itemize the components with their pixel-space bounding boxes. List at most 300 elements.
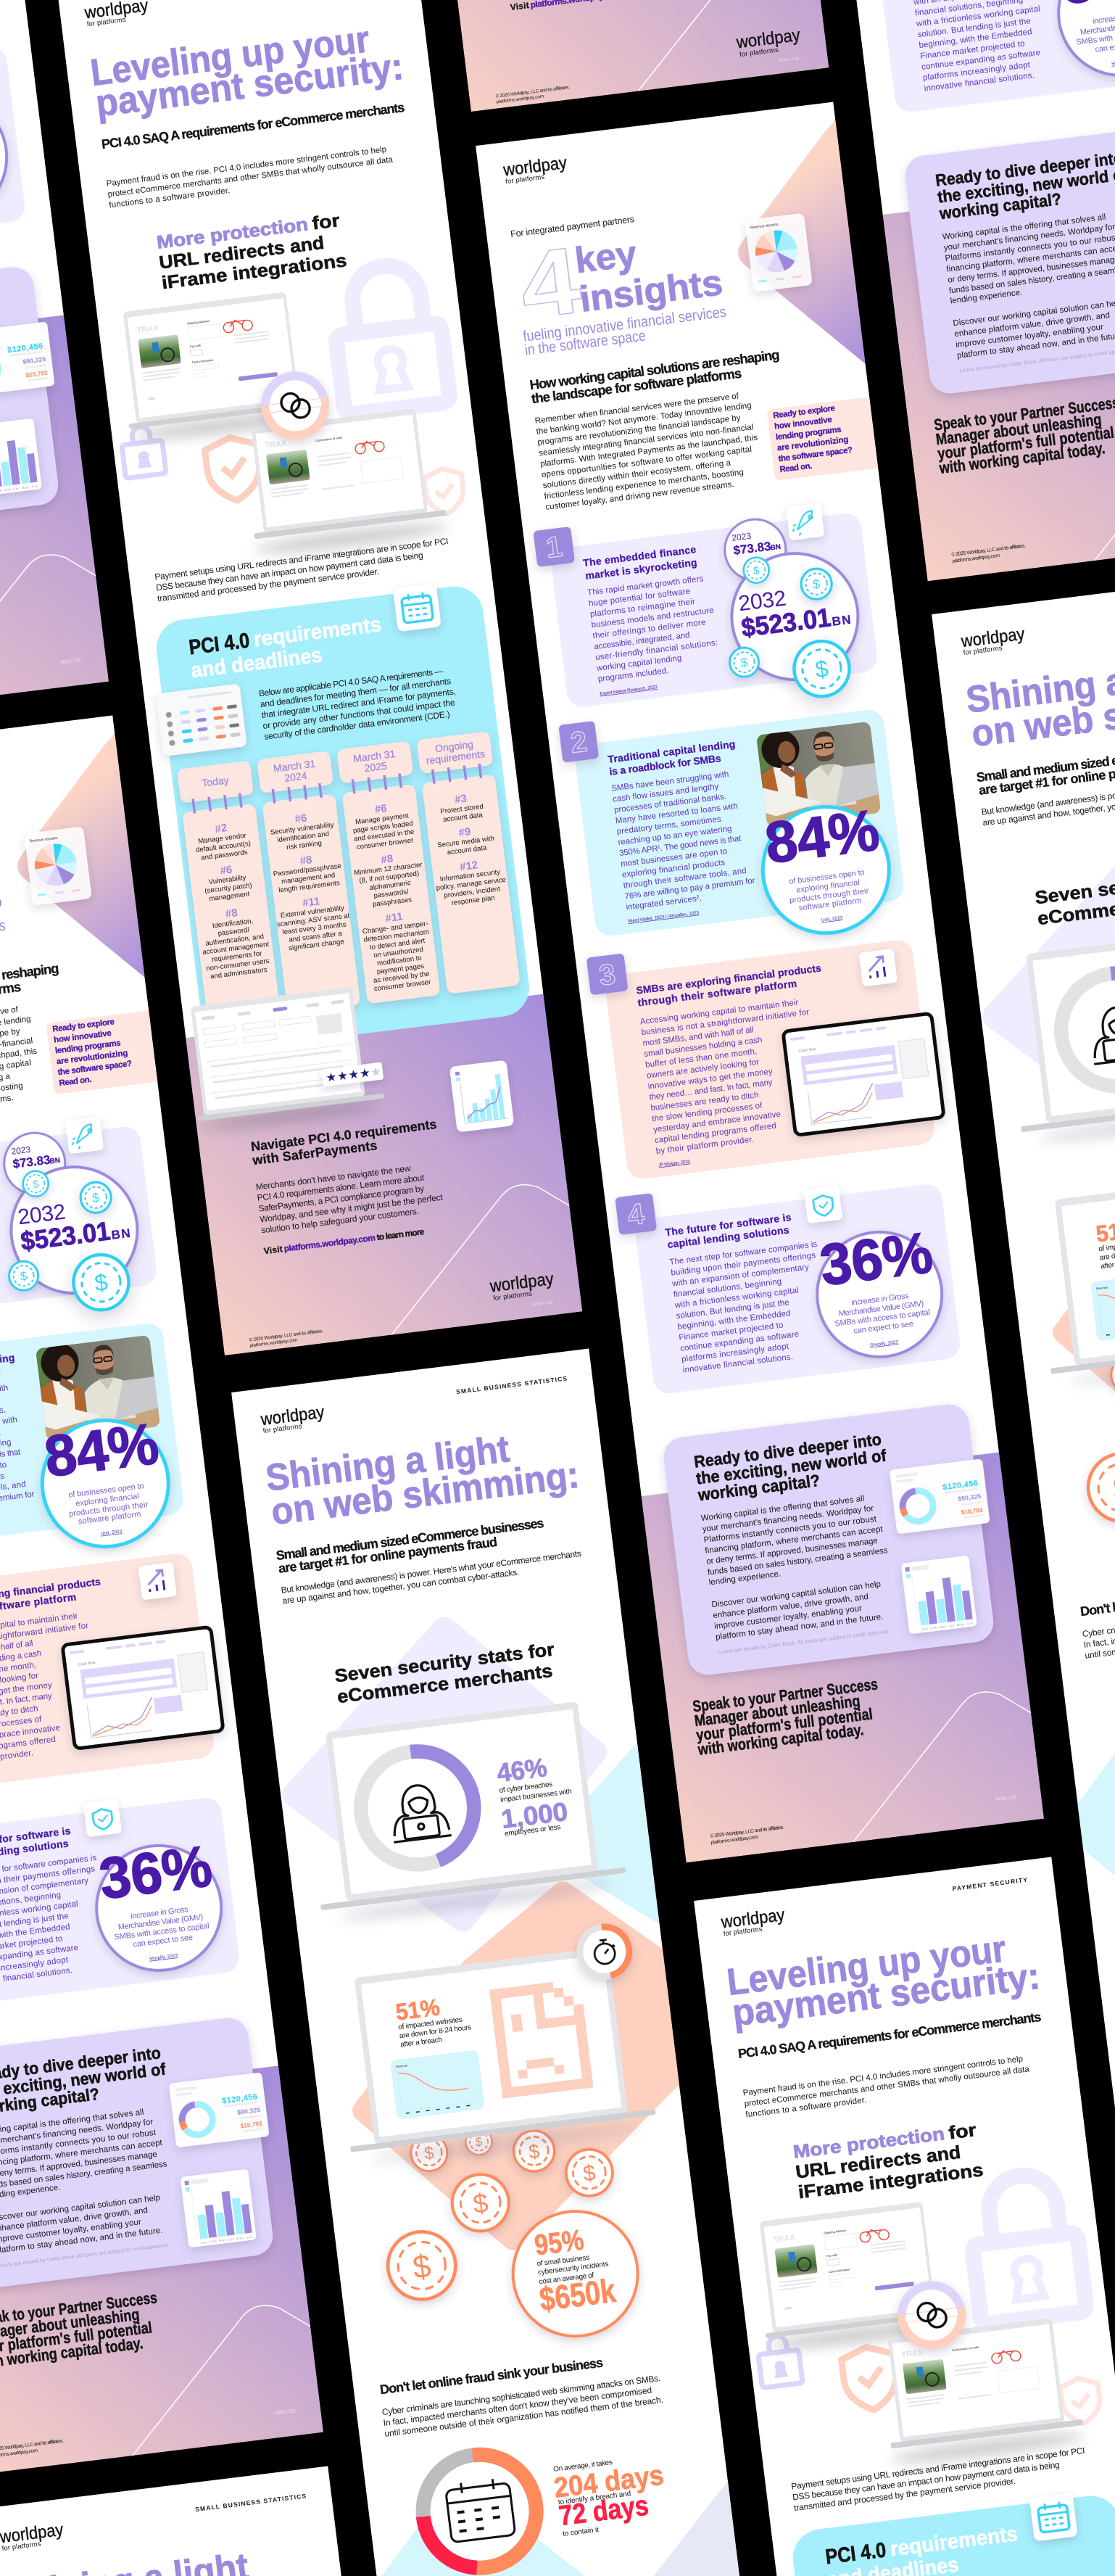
insight 4 text: capital lending solutions: [667, 1223, 790, 1250]
panel body: Working capital is the offering that solves all: [700, 1495, 865, 1523]
stat circle 84 percent: Unit, 2023: [821, 915, 843, 923]
intro text: protect eCommerce merchants and other SMBs that wholly outsource all data: [107, 155, 394, 199]
column: ongoing requirements: #9: [458, 825, 471, 839]
stat text days: to contain it: [563, 2526, 600, 2538]
panel heading: PCI 4.0: [188, 629, 251, 659]
footer logo: worldpay: [489, 1269, 555, 1297]
column: today: and administrators: [210, 966, 268, 981]
page copy: shining a light right: [910, 569, 1115, 2576]
visit link: Visit: [263, 1244, 283, 1256]
icon: hacker: [387, 1782, 452, 1842]
column: ongoing requirements: #3: [454, 793, 468, 806]
icon: link circle: [262, 373, 328, 439]
protection heading: [156, 210, 348, 293]
column: March 31 2025: passwords/: [373, 888, 410, 900]
donut dashboard card: $10,793: [961, 1506, 983, 1516]
stat circle 95 percent: 95%: [533, 2224, 586, 2262]
intro body: Remember when financial services were the preserve of: [534, 392, 739, 426]
intro paragraph: that integrate URL redirect and iFrame for payments,: [261, 686, 457, 720]
stat circle 36 percent: can expect to see: [853, 1320, 914, 1336]
column: today: password/: [217, 926, 250, 938]
insight 1 text: The embedded finance: [582, 543, 697, 569]
stat text 46 percent: 46%: [495, 1752, 549, 1788]
star rating card: [321, 1062, 384, 1087]
insight 3 text: by their platform provider.: [655, 1135, 755, 1156]
insight 3 text: innovative ways to get the money: [647, 1068, 774, 1091]
line and bar chart card: [449, 1060, 514, 1132]
icon: sad pixel file: [489, 1978, 594, 2099]
insight 3 text: businesses are ready to ditch: [650, 1091, 759, 1112]
title: payment security:: [94, 46, 406, 125]
insight 4 text: Finance market projected to: [679, 1321, 784, 1342]
intro body: platforms. With Integrated Payments as the launchpad, this: [539, 434, 758, 468]
title: Leveling up your: [88, 18, 372, 94]
insight 2 text: predatory terms, sometimes: [616, 815, 722, 836]
title: [263, 1420, 581, 1533]
title four key insights: insights: [578, 262, 725, 320]
panel heading: requirements: [252, 613, 383, 652]
panel: insight 2: [558, 686, 908, 963]
footer legal: platforms.worldpay.com: [249, 1338, 298, 1349]
intro body: the banking world? Not anymore. Today innovative lending: [536, 401, 752, 437]
laptop: checkout form: Shipping Address: [187, 319, 210, 326]
seven stats heading: Seven security stats for: [333, 1639, 555, 1686]
insight 4 text: with an expansion of complementary: [671, 1263, 810, 1289]
column: March 31 2024: #11: [302, 895, 320, 909]
insight 3 text: business is not a straightforward initiative for: [641, 1008, 810, 1037]
gradient diamond header: [724, 120, 866, 378]
column: March 31 2025: Manage payment: [355, 812, 410, 826]
panel body: improve customer loyalty, enabling your: [714, 1604, 863, 1631]
insight 3 text: [636, 962, 843, 1168]
panel body: platform to stay ahead now, and in the future.: [715, 1613, 884, 1642]
insight 2 text: cash flow issues and lengthy: [613, 783, 719, 804]
panel body: financing platform, where merchants can accept: [705, 1525, 884, 1556]
column: March 31 2024: and scans after a: [289, 930, 343, 944]
insight 3 text: small businesses holding a cash: [644, 1036, 763, 1059]
stat text days: On average, it takes: [553, 2459, 613, 2474]
seven stats heading: [333, 1639, 558, 1707]
stat text days: to identify a breach and: [558, 2490, 631, 2506]
stat circle 95 percent: $650k: [537, 2271, 618, 2318]
insight 3 text: owners are actively looking for: [646, 1058, 760, 1081]
stat text 46 percent: 1,000: [500, 1796, 569, 1834]
column: March 31 2024: significant change: [289, 938, 344, 952]
insight 4 text: innovative financial solutions.: [682, 1353, 794, 1375]
insight 4 text: building upon their payments offerings: [671, 1251, 816, 1278]
column: ongoing requirements: response plan: [451, 894, 495, 907]
explanatory text: [154, 536, 452, 603]
stat circle 84 percent: products through their: [789, 887, 869, 905]
fraud heading: Don't let online fraud sink your business: [379, 2356, 604, 2397]
fraud text: Cyber criminals are launching sophisticated web skimming attacks on SMBs.: [381, 2373, 661, 2417]
saferpayments text: Merchants don't have to navigate the new: [255, 1163, 412, 1192]
icon: large lock: [328, 260, 450, 415]
footer legal: PI.0XX – 2.25: [995, 1795, 1017, 1803]
laptop: checkout form: Pay with: [190, 344, 201, 348]
stat circle 84 percent: 84%: [762, 798, 882, 875]
insight 4 text: platforms increasingly adopt: [681, 1342, 790, 1364]
photo: two colleagues at a laptop: [756, 719, 882, 827]
intro heading: the landscape for software platforms: [531, 366, 742, 406]
column: March 31 2025: #11: [385, 910, 404, 925]
circle 2032 value: $523.01: [739, 602, 832, 643]
gradient footer band: [186, 994, 582, 1355]
column: March 31 2024: identification and: [277, 830, 330, 844]
title four key insights: in the software space: [524, 327, 647, 359]
saferpayments text: Worldpay, and see why it might just be the perfect: [260, 1192, 444, 1225]
insight 1 text: platforms to reimagine their: [589, 598, 696, 619]
column: March 31 2024: length requirements: [278, 879, 341, 894]
page copy: leveling up footer top center: [304, 0, 829, 112]
column: today: #2: [215, 822, 228, 835]
column: ongoing requirements: Secure media with: [437, 835, 494, 849]
stat text 46 percent: employees or less: [504, 1823, 561, 1838]
panel heading: [187, 613, 386, 682]
insight 2 text: exploring financial products: [621, 858, 726, 880]
bar chart card: Jan Feb Mar Apr May Jun: [921, 1621, 974, 1631]
panel body: your merchant's financing needs. Worldpay for: [702, 1504, 874, 1534]
panel: insight 4: [615, 1158, 962, 1397]
decorative curve: [837, 1687, 1044, 1842]
panel body: funds based on sales history, creating a seamless: [707, 1546, 888, 1577]
coins: $: [475, 2135, 484, 2150]
circle 2023 value: BN: [770, 543, 782, 553]
column: today: non-consumer users: [206, 957, 270, 973]
column: March 31 2025: (8, if not supported): [359, 870, 420, 885]
column: March 31 2025: #6: [374, 802, 388, 816]
insight 1 text: business models and restructure: [591, 606, 714, 629]
revenue line chart: Revenue: [396, 2063, 408, 2068]
gradient footer band: [642, 1452, 1044, 1862]
footer logo: for platforms: [493, 1290, 533, 1303]
stat circle 36 percent: SMBs with access to capital: [834, 1308, 930, 1329]
coins: $: [411, 2248, 433, 2286]
insight 1 text: Expert Market Research, 2023: [600, 685, 658, 697]
icon: calendar: [445, 2477, 515, 2543]
number tile 3: [586, 953, 629, 995]
number tile 2: 2: [569, 726, 589, 759]
column: March 31 2025: detection mechanism: [363, 928, 429, 944]
laptop: compliance dashboard: [184, 985, 386, 1133]
panel heading: Ready to dive deeper into: [693, 1429, 882, 1471]
circle 2032 value: [724, 546, 865, 687]
insight 3 text: most SMBs, and with half of all: [642, 1025, 754, 1048]
stat text 51 percent: 51%: [394, 1994, 442, 2026]
callout: ready to explore: Read on.: [779, 462, 813, 474]
page copy: insights lower left: [0, 715, 323, 2476]
column: March 31 2024: risk ranking: [286, 839, 323, 851]
panel body: lending experience.: [708, 1569, 782, 1587]
insight 3 text: yesterday and embrace innovative: [653, 1110, 782, 1134]
call to action: Speak to your Partner Success: [692, 1675, 879, 1715]
visit link: to learn more: [376, 1226, 425, 1242]
seven stats heading: eCommerce merchants: [336, 1661, 554, 1707]
stat circle 95 percent: cybersecurity incidents: [537, 2261, 609, 2276]
insight 4 text: continue expanding as software: [680, 1330, 800, 1353]
stat text 51 percent: after a breach: [400, 2036, 443, 2049]
column: ongoing requirements: Ongoing: [434, 738, 474, 754]
laptop: confirmation page: Confirmation of order: [315, 436, 343, 442]
stat text days: [552, 2453, 670, 2538]
footer legal: [249, 1328, 324, 1349]
insight 1 text: huge potential for software: [588, 587, 691, 608]
column: March 31 2025: #8: [380, 853, 394, 866]
stat circle 36 percent: increase in Gross: [851, 1292, 910, 1308]
intro paragraph: security of the cardholder data environment (CDE.): [264, 709, 450, 742]
insight 3 text: capital lending programs offered: [654, 1122, 777, 1145]
icon: calendar: [393, 583, 442, 632]
circle 2032 value: 2032: [737, 587, 787, 616]
title four key insights: [510, 210, 729, 359]
column: ongoing requirements: [417, 731, 521, 994]
stat circle 84 percent: exploring financial: [796, 878, 861, 895]
coins: $: [753, 565, 760, 577]
insight 1 text: working capital lending: [595, 654, 682, 673]
coins: $: [581, 2160, 597, 2187]
column: ongoing requirements: account data: [447, 844, 488, 856]
intro paragraph: Below are applicable PCI 4.0 SAQ A requirements —: [258, 666, 444, 698]
explanatory text: DSS because they can have an impact on how payment card data is being: [155, 550, 423, 593]
number tile 2: [558, 721, 599, 763]
footer logo: [489, 1269, 557, 1312]
column: today: Identification,: [212, 917, 254, 930]
column: March 31 2024: March 31: [273, 758, 316, 775]
insight 4 text: The future for software is: [665, 1211, 792, 1238]
column: today: default account(s): [195, 840, 252, 854]
icon: pale shield: [423, 466, 466, 516]
panel: requirements and deadlines: [146, 578, 533, 1054]
column: today: #8: [225, 907, 239, 920]
insight 4 text: with a frictionless working capital: [673, 1286, 799, 1310]
column: March 31 2024: Password/passphrase: [273, 862, 341, 878]
insight 2 text: integrated services².: [626, 894, 702, 912]
intro heading: How working capital solutions are reshaping: [529, 347, 780, 392]
coins: $: [471, 2187, 490, 2219]
stat text 46 percent: of cyber breaches: [499, 1780, 553, 1795]
insight 2 text: through their software tools, and: [623, 867, 747, 891]
saferpayments text: solution to help safeguard your customers.: [260, 1206, 420, 1235]
stat text days: 72 days: [558, 2490, 650, 2532]
coins: [373, 2113, 625, 2303]
insight 2 text: ¹Nerd Wallet, 2023 | ²Airwallex, 2023: [628, 910, 700, 924]
column: ongoing requirements: #12: [459, 859, 478, 873]
logo: for platforms: [86, 16, 126, 28]
insight 2 text: reaching up to an eye watering: [618, 825, 732, 847]
stat text days: 204 days: [552, 2460, 666, 2504]
column: March 31 2025: payment pages: [376, 962, 425, 976]
star rating card: ★: [370, 1065, 382, 1080]
column: today: (security patch): [204, 882, 252, 895]
insight 2 text: 350% APR¹. The good news is that: [619, 834, 742, 858]
insight 4 text: beginning, with the Embedded: [677, 1309, 791, 1332]
coins: $: [813, 656, 830, 683]
page copy: insights footer top left: [0, 0, 109, 725]
intro paragraph: and deadlines for meeting them — for all merchants: [260, 676, 452, 709]
circle 2023 value: [721, 516, 789, 584]
stat text 51 percent: are down for 8-24 hours: [399, 2023, 472, 2040]
footer legal: [710, 1795, 1018, 1846]
column: March 31 2024: scanning: ASV scans at: [277, 912, 350, 929]
column: March 31 2024: #8: [299, 854, 312, 867]
stat circle 36 percent: Shopify, 2023: [870, 1339, 899, 1348]
number tile 1: [533, 527, 575, 567]
pie chart card: Revenue streams: [750, 223, 779, 231]
title four key insights: 4: [514, 226, 586, 339]
stat circle 84 percent: software platform: [798, 896, 862, 912]
column: March 31 2025: page scripts loaded: [352, 820, 413, 835]
insight 3 text: they need… and fast. In fact, many: [649, 1078, 773, 1102]
visit link: [263, 1226, 425, 1256]
protection heading: for: [311, 210, 341, 234]
coins: [717, 548, 853, 707]
column: today: authentication, and: [205, 933, 265, 948]
panel body: Discover our working capital solution can help: [711, 1580, 882, 1609]
column: March 31 2025: consumer browser: [373, 978, 432, 993]
insight 2 text: Many have resorted to loans with: [615, 802, 738, 825]
stat circle 36 percent: [809, 1219, 949, 1364]
column: March 31 2025: passphrases: [372, 896, 413, 909]
column: today: Today: [201, 774, 229, 789]
insight 1 text: accessible, integrated, and: [594, 631, 690, 651]
insight 4 text: solution. But lending is just the: [676, 1298, 789, 1321]
insight 2 text: 76% are willing to pay a premium for: [624, 877, 755, 901]
icon: stopwatch ring: [577, 1924, 632, 1979]
circle 2023 value: 2023: [731, 531, 752, 543]
audience line: For integrated payment partners: [510, 214, 635, 239]
insight 1 text: This rapid market growth offers: [587, 574, 704, 598]
column: today: Vulnerability: [208, 874, 246, 886]
intro text: Payment fraud is on the rise. PCI 4.0 includes more stringent controls to help: [106, 145, 387, 189]
insight 2 text: processes of traditional banks.: [613, 793, 727, 814]
callout: ready to explore: how innovative: [774, 416, 832, 432]
insight 2 text: Traditional capital lending: [607, 738, 736, 765]
insight 3 text: SMBs are exploring financial products: [636, 962, 822, 996]
icon: small lock: [120, 424, 166, 478]
intro body: solutions directly within their ecosystem, offering a: [542, 458, 731, 490]
toggle settings card: [156, 684, 247, 756]
number tile 4: 4: [626, 1198, 647, 1231]
laptop: downtime stat: [330, 1944, 658, 2168]
column: March 31 2024: management and: [281, 871, 336, 886]
stat text 46 percent: impact businesses with: [500, 1788, 572, 1804]
intro text: But knowledge (and awareness) is power. Here's what your eCommerce merchants: [281, 1548, 581, 1595]
coins: $: [423, 2144, 435, 2164]
saferpayments heading: with SaferPayments: [251, 1138, 378, 1168]
insight 3 text: through their software platform: [637, 978, 797, 1008]
logo: worldpay: [502, 153, 568, 181]
donut dashboard card: $120,456: [942, 1479, 979, 1492]
column: ongoing requirements: account data: [443, 811, 484, 824]
coins: $: [812, 577, 821, 592]
subtitle: are target #1 for online payments fraud: [278, 1535, 498, 1576]
column: today: account management: [202, 941, 270, 957]
icon: peach shield: [204, 434, 263, 503]
stat circle 95 percent: of small business: [536, 2254, 590, 2269]
logo: for platforms: [505, 173, 545, 186]
decorative curve: [376, 1179, 582, 1335]
calendar ring: [408, 2440, 551, 2576]
stat text 51 percent: of impacted websites: [398, 2016, 463, 2031]
column: March 31 2025: to detect and alert: [369, 937, 426, 951]
laptop: checkout form: TRAX: [136, 323, 159, 335]
insight 2 text: [607, 738, 758, 924]
page: leveling up payment security main: [57, 0, 582, 1355]
icon: growth chart: [859, 949, 898, 987]
title four key insights: key: [573, 233, 639, 281]
intro body: programs are revolutionizing the financial landscape by: [537, 413, 741, 447]
title: Shining a light: [263, 1428, 512, 1500]
insight 3 text: JP Morgan, 2016: [658, 1159, 691, 1168]
insight 1 text: market is skyrocketing: [584, 556, 697, 582]
panel body: or deny terms. If approved, businesses manage: [706, 1537, 878, 1566]
column: March 31 2025: consumer browser: [356, 836, 415, 851]
column: ongoing requirements: requirements: [426, 748, 486, 767]
insight 1 text: their offerings to deliver more: [592, 618, 706, 640]
stat circle 36 percent: 36%: [816, 1220, 936, 1297]
insight 4 text: financial solutions, beginning: [673, 1277, 782, 1299]
fraud text: until someone outside of their organization has notified them of the breach.: [384, 2395, 664, 2439]
intro paragraph: or provide any other functions that could impact the: [262, 697, 456, 731]
column: March 31 2025: Change- and tamper-: [362, 920, 428, 936]
panel: insight 3: [586, 917, 947, 1182]
insight 4 text: [665, 1208, 831, 1375]
donut 46 percent: [355, 1745, 481, 1871]
column: March 31 2024: External vulnerability: [280, 904, 345, 920]
intro body: seamlessly integrating financial services into non-financial: [539, 423, 754, 458]
column: March 31 2025: March 31: [352, 748, 396, 764]
insight 1 text: user-friendly financial solutions:: [595, 638, 718, 662]
fraud text: [381, 2373, 664, 2439]
insight 1 text: [582, 542, 723, 697]
laptop: checkout form: Card information: [191, 358, 213, 364]
stat text 46 percent: [494, 1749, 576, 1838]
circle 2023 value: $73.83: [733, 540, 771, 558]
panel body: enhance platform value, drive growth, and: [713, 1593, 869, 1620]
donut dashboard card: [890, 1458, 990, 1534]
footer legal: © 2025 Worldpay, LLC and its affiliates.: [710, 1824, 784, 1839]
column: March 31 2025: as received by the: [373, 970, 430, 985]
star rating card: ★★★★: [325, 1066, 371, 1086]
intro paragraph: [258, 664, 459, 742]
coins: $: [528, 2140, 541, 2163]
column: March 31 2024: 2024: [283, 769, 308, 784]
stat circle 95 percent: cost an average of: [539, 2271, 594, 2286]
intro text: functions to a software provider.: [109, 186, 231, 210]
title: on web skimming:: [269, 1454, 581, 1533]
page copy: leveling up lower right: [694, 1857, 1115, 2576]
column: March 31 2025: modification to: [377, 954, 422, 967]
panel heading: working capital?: [697, 1471, 821, 1504]
panel body: Platforms instantly connects you to our robust: [703, 1515, 877, 1545]
footer legal: platforms.worldpay.com: [710, 1835, 759, 1846]
saferpayments text: SaferPayments, a PCI compliance program by: [258, 1184, 425, 1214]
page copy: shining a light bottom left: [0, 2464, 601, 2576]
panel body: [700, 1493, 898, 1656]
footer legal: © 2025 Worldpay, LLC and its affiliates.: [249, 1328, 324, 1343]
insight 3 text: buffer of less than one month,: [645, 1047, 758, 1070]
icon: rocket: [786, 503, 824, 540]
column: March 31 2025: on unauthorized: [373, 946, 423, 959]
laptop: checkout form: [115, 290, 318, 444]
stat circle 84 percent: [755, 797, 896, 940]
panel body: Loans are issued by Celtic Bank. All loans are subject to credit approval.: [718, 1628, 890, 1656]
column: ongoing requirements: providers, incident: [444, 885, 501, 900]
revenue line chart: [390, 2049, 485, 2120]
logo: for platforms: [262, 1422, 302, 1435]
saferpayments heading: Navigate PCI 4.0 requirements: [250, 1117, 437, 1154]
panel: dive deeper: [661, 1401, 1004, 1677]
